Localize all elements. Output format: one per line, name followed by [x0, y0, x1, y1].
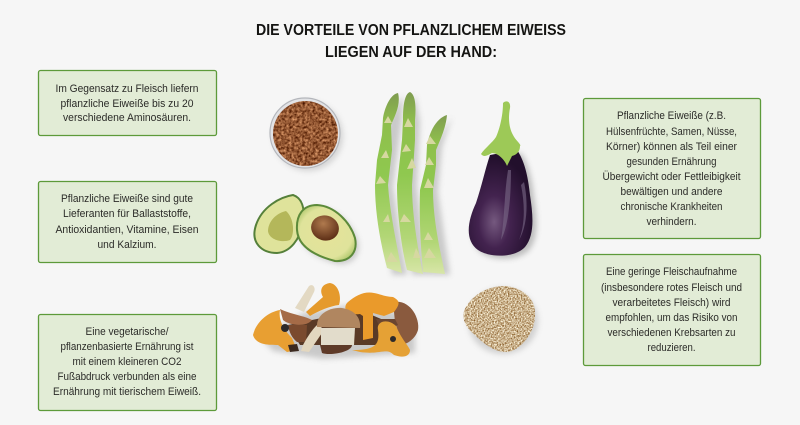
panel: less meat — [584, 254, 760, 366]
panel: overweight and chronic disease: Hülsenfrüchte, Samen, Nüsse, — [606, 126, 737, 138]
icon: mushrooms — [253, 283, 418, 359]
panel: less meat: reduzieren. — [648, 342, 696, 354]
panel: less meat: verschiedenen Krebsarten zu — [608, 327, 736, 339]
panel: overweight and chronic disease: bewältigen und andere — [620, 186, 722, 198]
panel: less meat: empfohlen, um das Risiko von — [606, 312, 738, 324]
icon: eggplant — [469, 101, 536, 259]
panel: less meat: Eine geringe Fleischaufnahme — [606, 266, 737, 278]
panel: nutrients — [38, 182, 216, 262]
panel: overweight and chronic disease: Pflanzliche Eiweiße (z.B. — [617, 110, 726, 122]
panel: nutrients: und Kalzium. — [98, 239, 156, 251]
panel: amino acids — [38, 70, 216, 136]
panel: overweight and chronic disease: gesunden Ernährung — [626, 156, 716, 168]
title — [256, 22, 566, 61]
panel: CO2 footprint: mit einem kleineren CO2 — [72, 356, 182, 368]
icon: bowl of lentils — [270, 98, 343, 171]
panel: overweight and chronic disease: verhindern. — [646, 216, 696, 228]
panel: CO2 footprint: Eine vegetarische/ — [86, 326, 169, 338]
panel: CO2 footprint — [38, 314, 216, 410]
panel: amino acids: Im Gegensatz zu Fleisch liefern — [56, 83, 198, 95]
title: LIEGEN AUF DER HAND: — [325, 44, 497, 61]
panel: nutrients: Antioxidantien, Vitamine, Eisen — [56, 224, 198, 236]
panel: CO2 footprint: Fußabdruck verbunden als eine — [58, 371, 196, 383]
panel: overweight and chronic disease: Körner) können als Teil einer — [606, 141, 737, 153]
panel: overweight and chronic disease — [584, 98, 760, 238]
panel: CO2 footprint: Ernährung mit tierischem Eiweiß. — [53, 386, 201, 398]
panel: overweight and chronic disease: chronische Krankheiten — [620, 201, 722, 213]
panel: less meat: verarbeitetes Fleisch) wird — [612, 297, 730, 309]
panel: overweight and chronic disease: Übergewicht oder Fettleibigkeit — [602, 171, 740, 183]
icon: avocado — [254, 195, 359, 264]
panel: nutrients: Pflanzliche Eiweiße sind gute — [61, 193, 193, 205]
panel: amino acids: verschiedene Aminosäuren. — [63, 112, 191, 124]
panel: CO2 footprint: pflanzenbasierte Ernährung ist — [60, 341, 194, 353]
panel: less meat: (insbesondere rotes Fleisch und — [601, 282, 742, 294]
panel: nutrients: Lieferanten für Ballaststoffe, — [63, 208, 191, 220]
title: DIE VORTEILE VON PFLANZLICHEM EIWEISS — [256, 22, 566, 39]
icon: asparagus — [375, 92, 452, 275]
panel: amino acids: pflanzliche Eiweiße bis zu 20 — [60, 98, 194, 110]
icon: grains — [463, 286, 538, 354]
